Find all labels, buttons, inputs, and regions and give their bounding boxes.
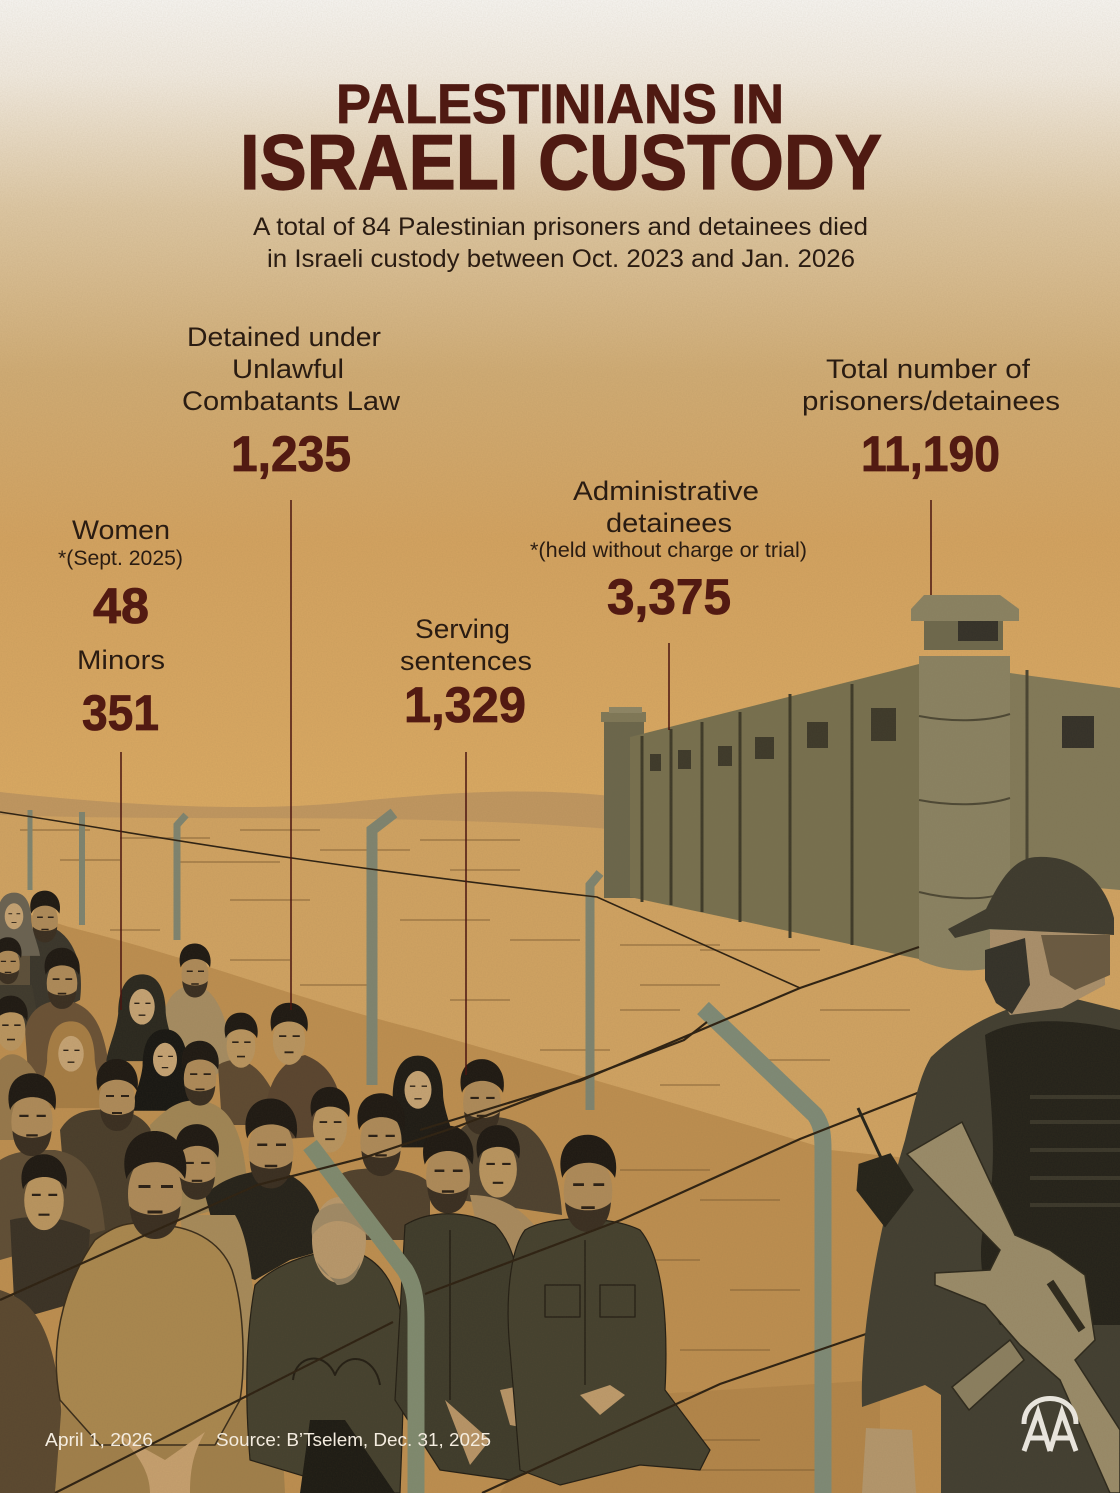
women in hijabs and faces, back rows (30, 891, 60, 942)
bent foreground fence post right (703, 1008, 823, 1493)
subtitle (253, 213, 868, 273)
subtitle: A total of 84 Palestinian prisoners and detainees died (253, 213, 868, 241)
stat: total (802, 354, 1060, 595)
right wall (1010, 670, 1120, 890)
stat: minors: Minors (77, 645, 165, 675)
desert ground (0, 815, 1120, 1493)
older detainee in dark uniform (247, 1197, 405, 1493)
left edge seated person (0, 1290, 62, 1493)
stat: minors (77, 645, 165, 1010)
barbed wires (0, 812, 925, 1493)
stat: women: *(Sept. 2025) (58, 547, 183, 570)
stat: total: prisoners/detainees (802, 386, 1060, 416)
radio (858, 1108, 912, 1225)
stat: administrative detainees: Administrative (573, 476, 759, 506)
detainee in tan sweater (55, 1131, 285, 1493)
stat: administrative detainees: detainees (606, 508, 732, 538)
stat: total: 11,190 (861, 426, 1000, 482)
illustration: prison yard scene (0, 595, 1120, 1493)
stat: administrative detainees (530, 476, 807, 730)
stat: serving sentences (400, 614, 532, 1075)
stat: administrative detainees: *(held without charge or trial) (530, 539, 807, 562)
stat: unlawful combatants: 1,235 (231, 426, 351, 482)
bent foreground fence post left (310, 1145, 416, 1493)
guard body (862, 995, 1120, 1493)
distant hills (0, 791, 620, 900)
title: PALESTINIANS IN (336, 72, 784, 135)
hand (862, 1428, 916, 1493)
stat: serving sentences: Serving (415, 614, 510, 644)
lower dark foreground soil (500, 1380, 880, 1493)
head, cap and mask (948, 857, 1114, 1015)
icon: agency logo (1024, 1398, 1076, 1451)
long wall (630, 664, 919, 959)
stat: total: Total number of (826, 354, 1031, 384)
stat: unlawful combatants: Unlawful (232, 354, 344, 384)
stat: unlawful combatants: Detained under (187, 322, 381, 352)
ground hatching (20, 830, 910, 1470)
prison wall and towers (601, 595, 1120, 970)
footer date: April 1, 2026 (45, 1430, 153, 1450)
subtitle: in Israeli custody between Oct. 2023 and Jan. 2026 (267, 245, 855, 273)
title (240, 72, 882, 206)
middle row bodies (60, 1110, 165, 1250)
stat: women: 48 (93, 578, 149, 634)
detainee in dark uniform, center (395, 1126, 560, 1480)
detainee in dark uniform, right (508, 1135, 710, 1485)
lower dirt bank (0, 905, 1120, 1493)
stat: serving sentences: 1,329 (404, 677, 526, 733)
stat: minors: 351 (82, 685, 159, 741)
crowd of detainees (0, 891, 710, 1493)
stat: women (58, 515, 183, 634)
stat: unlawful combatants: Combatants Law (182, 386, 401, 416)
row 2 bodies (340, 1168, 430, 1240)
footer source: Source: B’Tselem, Dec. 31, 2025 (216, 1430, 491, 1450)
fence posts (30, 810, 600, 1110)
title: ISRAELI CUSTODY (240, 118, 882, 206)
main watchtower (911, 595, 1019, 970)
back row bodies (17, 925, 81, 1020)
stat: unlawful combatants (182, 322, 401, 1010)
stat: administrative detainees: 3,375 (607, 569, 731, 625)
tactical vest (981, 1021, 1120, 1325)
guard with rifle (858, 857, 1120, 1493)
stat: women: Women (72, 515, 170, 545)
small far tower (601, 707, 646, 898)
rifle (907, 1122, 1120, 1493)
stat: serving sentences: sentences (400, 646, 532, 676)
